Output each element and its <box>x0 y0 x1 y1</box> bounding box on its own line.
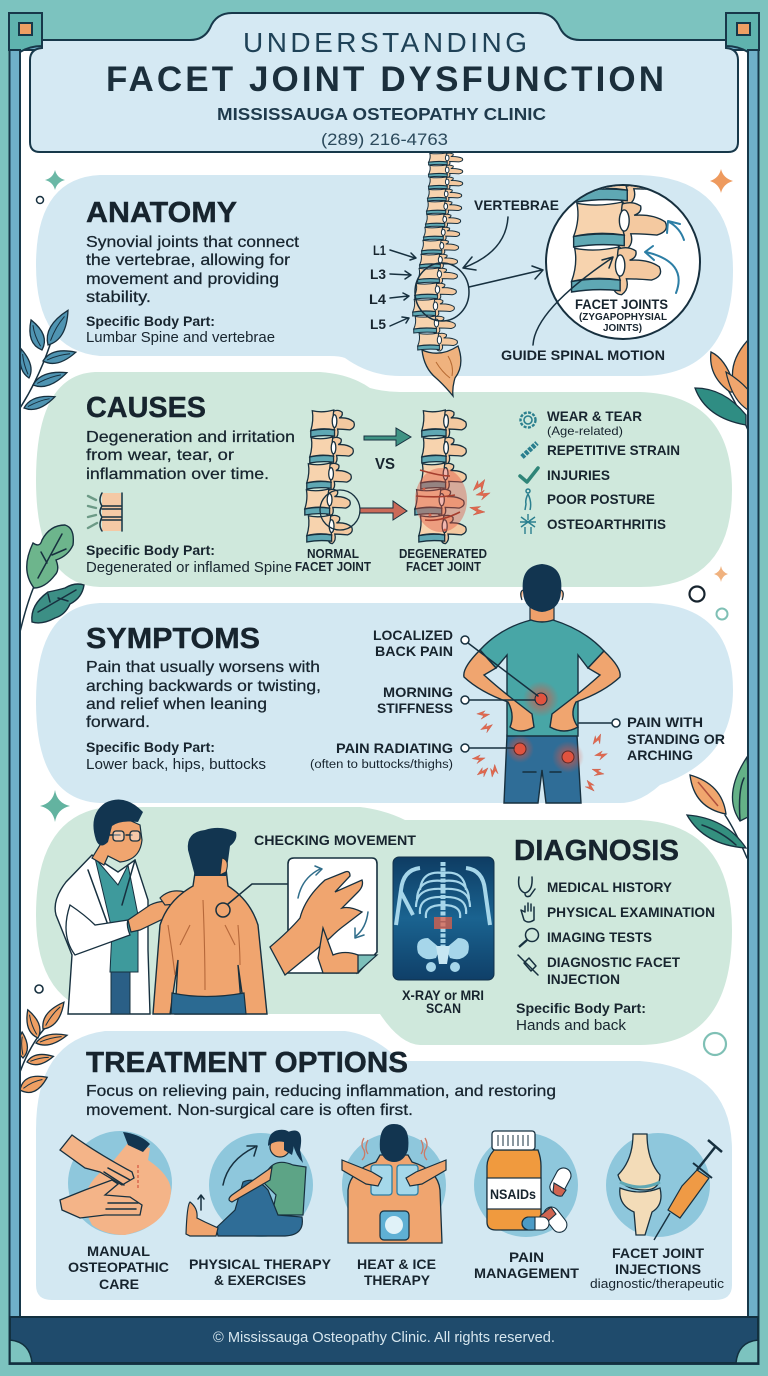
callout: vertebrae: VERTEBRAE <box>474 197 559 213</box>
pain bolts around hips <box>472 709 607 794</box>
scrubs <box>95 858 138 972</box>
callout: pain with standing or arching: PAIN WITH <box>627 714 703 730</box>
callout: pain radiating <box>310 740 514 771</box>
inset: hand examination <box>270 858 377 975</box>
diagnosis body part: Hands and back <box>516 1018 627 1034</box>
corner ornament: top left <box>9 13 42 52</box>
label: manual osteopathic care: MANUAL <box>87 1243 150 1259</box>
item: repetitive strain: REPETITIVE STRAIN <box>547 442 680 458</box>
header banner <box>30 13 738 152</box>
item: osteoarthritis: OSTEOARTHRITIS <box>547 516 666 532</box>
label: pain management <box>474 1249 579 1281</box>
causes body part <box>86 542 292 576</box>
callout: localized back pain: BACK PAIN <box>375 643 453 659</box>
illustration: manual osteopathic care <box>60 1131 172 1235</box>
icon: person posture <box>525 489 531 510</box>
item: wear and tear: (Age-related) <box>547 424 623 438</box>
spine level labels and arrows: L3 <box>370 266 386 282</box>
item: poor posture: POOR POSTURE <box>547 491 655 507</box>
icon: gear <box>520 412 536 428</box>
callout ring on shoulder <box>216 903 230 917</box>
symptoms body part <box>86 739 266 773</box>
heading: anatomy: ANATOMY <box>86 197 237 229</box>
callout: pain with standing or arching: ARCHING <box>627 747 693 763</box>
glasses <box>110 834 132 836</box>
illustration: physical therapy <box>186 1130 313 1237</box>
corner ornament: top right <box>726 13 759 52</box>
leaves: green branch <box>20 525 84 632</box>
illustration: full spine <box>413 153 463 396</box>
labels: normal vs degenerated: FACET JOINT <box>406 560 481 574</box>
label: physical therapy and exercises <box>189 1256 332 1288</box>
label: heat and ice therapy <box>357 1256 436 1288</box>
doctor sleeve <box>66 905 130 955</box>
anatomy body part: Specific Body Part: <box>86 313 215 329</box>
label: manual osteopathic care: CARE <box>99 1276 139 1292</box>
item: diagnostic facet injection: DIAGNOSTIC FACET <box>547 954 680 970</box>
panel: treatment background <box>36 1031 732 1300</box>
labels: normal vs degenerated: NORMAL <box>307 547 359 561</box>
label: manual osteopathic care <box>68 1243 169 1292</box>
labels: normal vs degenerated: DEGENERATED <box>399 547 487 561</box>
item: imaging tests: IMAGING TESTS <box>547 929 652 945</box>
label: x-ray or mri scan: SCAN <box>426 1001 461 1016</box>
icon: strain <box>522 443 537 457</box>
anatomy description <box>86 234 300 306</box>
leaves: blue branch <box>21 309 78 410</box>
title line one: UNDERSTANDING <box>243 27 527 58</box>
illustration: magnified facet joints <box>532 184 701 346</box>
pain spots <box>523 681 559 717</box>
anatomy body part <box>86 313 275 346</box>
spine level labels and arrows: L1 <box>373 242 386 258</box>
spine level labels and arrows: L5 <box>370 316 386 332</box>
facet joints label <box>575 296 668 334</box>
labels: normal vs degenerated: FACET JOINT <box>295 560 371 574</box>
panel: diagnosis background <box>36 807 732 1045</box>
section: symptoms text <box>86 623 321 773</box>
footer band <box>10 1317 758 1363</box>
decorative sparkles and rings: right middle <box>690 566 728 620</box>
section: diagnosis text <box>514 835 715 1034</box>
label: vs: VS <box>375 456 395 473</box>
section: treatment text <box>86 1047 556 1119</box>
item: wear and tear <box>547 408 642 438</box>
pants <box>504 735 581 803</box>
anatomy description: stability. <box>86 289 151 306</box>
arrow: green comparison <box>364 428 411 446</box>
treatment description: Focus on relieving pain, reducing inflammation, and restoring <box>86 1083 556 1100</box>
label: pain management: PAIN <box>509 1249 544 1265</box>
causes description: inflammation over time. <box>86 466 269 483</box>
doctor face <box>92 815 142 865</box>
callout: vertebrae <box>463 197 559 270</box>
symptoms description: and relief when leaning <box>86 696 267 713</box>
symptoms description <box>86 659 321 731</box>
label: heat and ice therapy: HEAT & ICE <box>357 1256 436 1272</box>
callout: localized back pain <box>373 627 538 696</box>
illustration: person holding lower back <box>464 564 620 803</box>
heading: treatment options: TREATMENT OPTIONS <box>86 1047 408 1079</box>
label: facet joint injections: INJECTIONS <box>615 1261 701 1277</box>
doctor hair <box>93 800 143 846</box>
facet joints label: (ZYGAPOPHYSIAL <box>579 311 668 323</box>
spine level labels and arrows: L4 <box>369 291 386 307</box>
item: physical examination: PHYSICAL EXAMINATION <box>547 904 715 920</box>
icon: hand <box>521 903 534 922</box>
symptoms description: Pain that usually worsens with <box>86 659 320 676</box>
panel: symptoms background <box>36 603 733 803</box>
causes description: from wear, tear, or <box>86 447 235 464</box>
label: facet joint injections: FACET JOINT <box>612 1245 704 1261</box>
pain bolts <box>467 477 490 519</box>
anatomy description: the vertebrae, allowing for <box>86 252 291 269</box>
section: causes text <box>86 392 295 576</box>
leaves: orange and teal, middle right <box>687 757 752 858</box>
heading: diagnosis: DIAGNOSIS <box>514 835 679 867</box>
panel: causes background <box>36 372 732 587</box>
icon: osteoarthritis joint <box>520 514 536 534</box>
causes description: Degeneration and irritation <box>86 429 295 446</box>
icon: syringe <box>518 955 538 975</box>
callout: localized back pain: LOCALIZED <box>373 627 453 643</box>
illustration: normal facet joint <box>305 410 360 544</box>
shirt <box>480 620 604 736</box>
panel: anatomy background <box>36 175 733 376</box>
symptoms description: forward. <box>86 714 150 731</box>
item: injuries: INJURIES <box>547 467 610 483</box>
label: manual osteopathic care: OSTEOPATHIC <box>68 1259 169 1275</box>
doctor hands <box>128 902 172 932</box>
callout: pain radiating: PAIN RADIATING <box>336 740 453 756</box>
decorative sparkles and rings: upper <box>36 169 733 204</box>
heading: causes: CAUSES <box>86 392 206 424</box>
diagnosis body part <box>516 1000 646 1034</box>
icon: magnifier <box>519 928 538 947</box>
label: checking movement: CHECKING MOVEMENT <box>254 832 416 848</box>
icon: check <box>520 468 538 482</box>
causes body part: Specific Body Part: <box>86 542 215 558</box>
callout: morning stiffness: STIFFNESS <box>377 700 453 716</box>
anatomy description: movement and providing <box>86 271 279 288</box>
symptoms body part: Lower back, hips, buttocks <box>86 757 266 773</box>
treatment description: movement. Non-surgical care is often first. <box>86 1102 413 1119</box>
symptoms description: arching backwards or twisting, <box>86 678 321 695</box>
title line two: FACET JOINT DYSFUNCTION <box>106 60 664 99</box>
illustration: heat and ice therapy <box>342 1124 446 1243</box>
footer copyright: © Mississauga Osteopathy Clinic. All rights reserved. <box>213 1329 555 1346</box>
callout: pain radiating: (often to buttocks/thighs) <box>310 759 453 771</box>
callout: morning stiffness <box>377 684 535 716</box>
spine level labels and arrows <box>369 242 416 332</box>
callout: pain with standing or arching: STANDING OR <box>627 731 725 747</box>
coat <box>55 855 150 1014</box>
connector line to hand inset <box>228 884 288 904</box>
illustration: facet joint injection <box>606 1133 722 1240</box>
causes body part: Degenerated or inflamed Spine <box>86 560 292 576</box>
illustration: degenerated facet joint <box>415 410 467 544</box>
neck and ears <box>530 602 554 622</box>
anatomy body part: Lumbar Spine and vertebrae <box>86 330 275 346</box>
treatment labels <box>68 1243 725 1292</box>
item: diagnostic facet injection: INJECTION <box>547 971 620 987</box>
leaves: orange and teal, upper right <box>695 340 752 430</box>
causes list <box>520 408 680 534</box>
label: physical therapy and exercises: PHYSICAL THERAPY <box>189 1256 332 1272</box>
facet joints label: FACET JOINTS <box>575 296 668 312</box>
label: physical therapy and exercises: & EXERCISES <box>214 1272 306 1288</box>
callout: morning stiffness: MORNING <box>383 684 453 700</box>
label: facet joint injections: diagnostic/therapeutic <box>590 1276 725 1291</box>
causes description <box>86 429 295 483</box>
label: guide spinal motion: GUIDE SPINAL MOTION <box>501 347 665 363</box>
hair <box>523 564 561 612</box>
arms and hands <box>464 650 534 731</box>
anatomy description: Synovial joints that connect <box>86 234 300 251</box>
icon: stethoscope <box>519 877 535 897</box>
leaves: orange branch, lower left <box>21 1001 68 1094</box>
item: diagnostic facet injection <box>547 954 680 987</box>
section: anatomy text <box>86 197 300 346</box>
label: pain management: MANAGEMENT <box>474 1265 579 1281</box>
lumbar highlight ring and connector <box>415 263 543 321</box>
label: facet joint injections <box>590 1245 725 1291</box>
inset: x-ray scan <box>393 857 494 980</box>
facet joints label: JOINTS) <box>603 322 642 334</box>
icon: inflamed spine segment <box>88 493 122 531</box>
heading: symptoms: SYMPTOMS <box>86 623 260 655</box>
illustration: patient back <box>153 828 267 1014</box>
label: x-ray or mri scan <box>402 988 484 1016</box>
callout: pain with standing or arching <box>579 714 725 763</box>
medication label: NSAIDs <box>490 1186 536 1202</box>
label: heat and ice therapy: THERAPY <box>364 1272 431 1288</box>
arrow: red comparison <box>360 501 407 520</box>
treatment description <box>86 1083 556 1119</box>
label: x-ray or mri scan: X-RAY or MRI <box>402 988 484 1003</box>
symptoms body part: Specific Body Part: <box>86 739 215 755</box>
illustration: pain management medication <box>474 1131 578 1237</box>
illustration: doctor <box>55 800 185 1014</box>
labels: normal vs degenerated <box>295 547 487 574</box>
decorative sparkles and rings: lower <box>35 790 726 1055</box>
phone number: (289) 216-4763 <box>321 130 448 149</box>
clinic name: MISSISSAUGA OSTEOPATHY CLINIC <box>217 104 546 124</box>
item: wear and tear: WEAR & TEAR <box>547 408 642 424</box>
diagnosis body part: Specific Body Part: <box>516 1000 646 1016</box>
item: medical history: MEDICAL HISTORY <box>547 879 673 895</box>
